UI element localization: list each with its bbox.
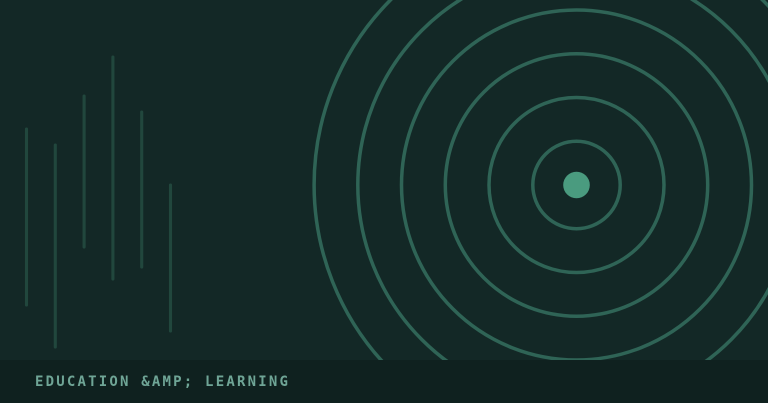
footer bar <box>0 360 768 403</box>
vertical lines <box>26 57 170 347</box>
center dot <box>563 172 590 198</box>
category label: EDUCATION &AMP; LEARNING <box>35 374 290 390</box>
concentric rings <box>314 0 768 403</box>
